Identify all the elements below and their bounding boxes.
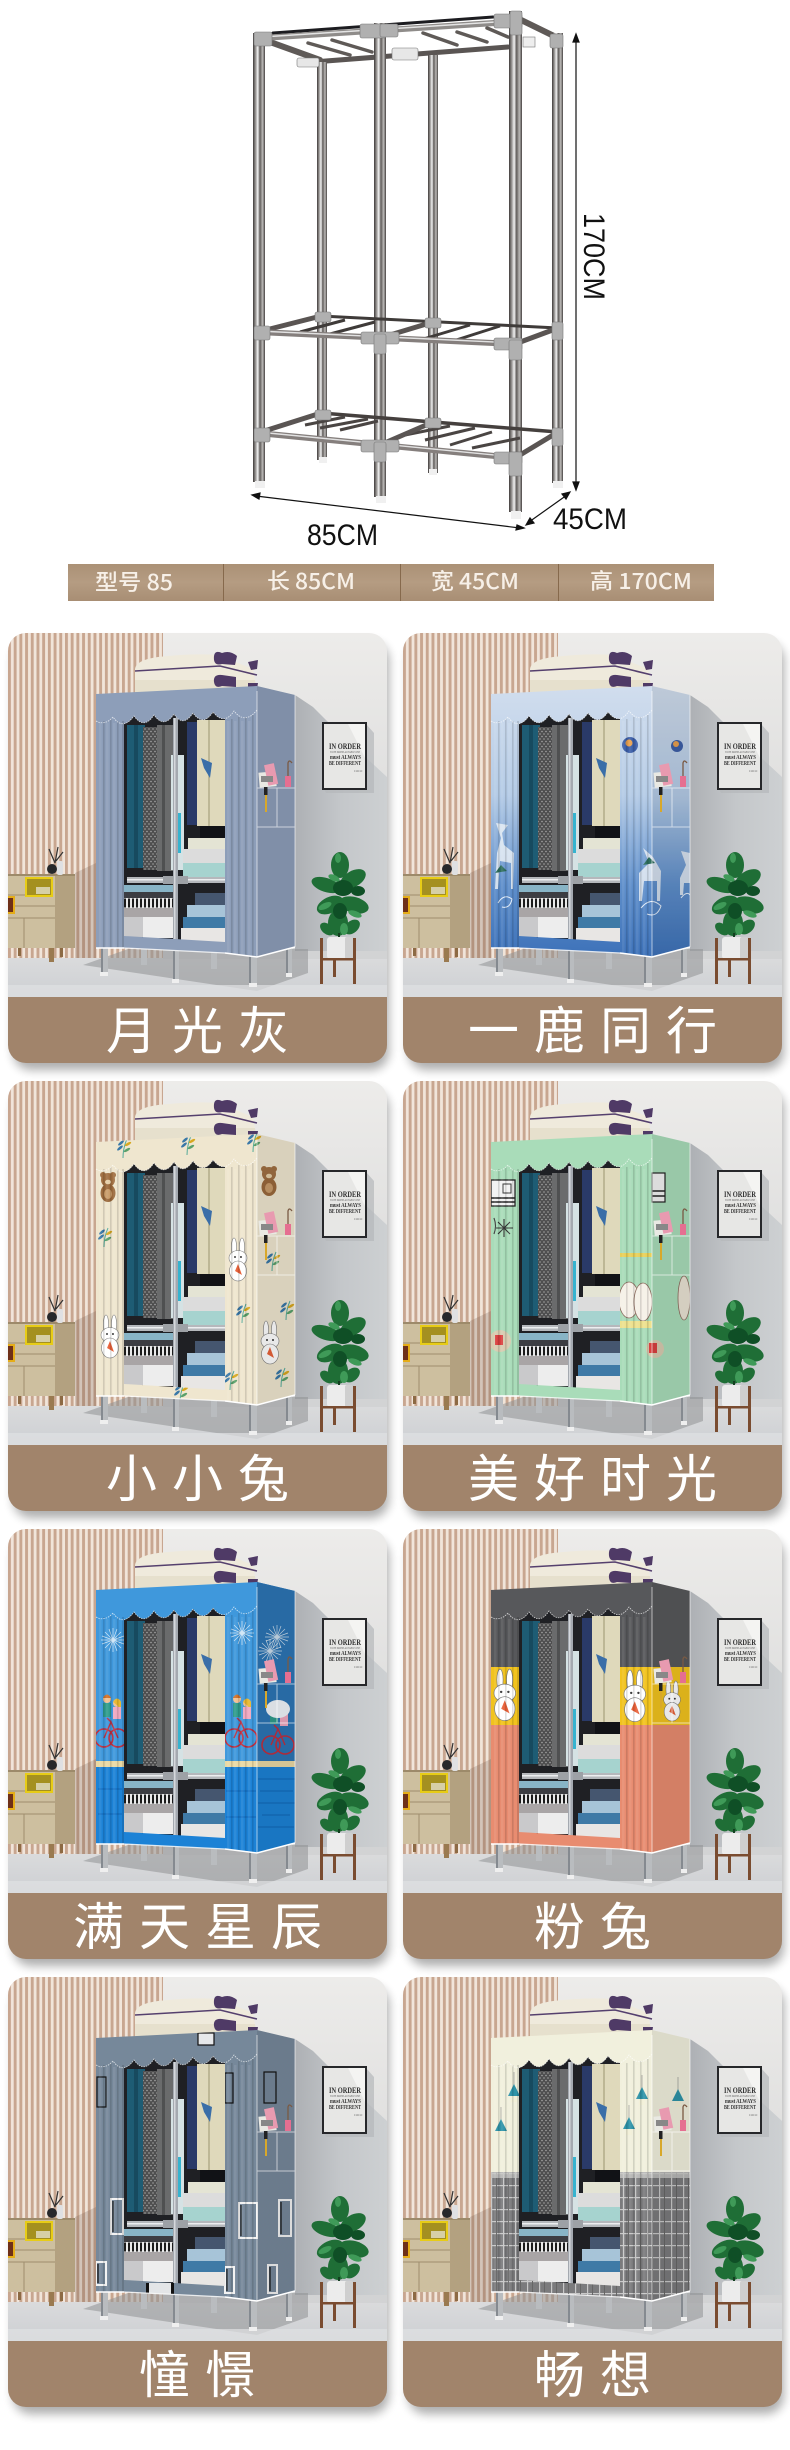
poster text	[329, 2086, 363, 2117]
base panel blocks	[146, 2283, 174, 2294]
spec: length: 长 85CM	[267, 564, 355, 596]
spec band	[68, 564, 714, 601]
poster text	[724, 2086, 758, 2117]
poster text: BE DIFFERENT	[724, 761, 756, 767]
depth arrow	[526, 492, 570, 525]
label bar	[8, 2341, 387, 2407]
poster text: BE DIFFERENT	[724, 1209, 756, 1215]
poster text: COCO	[749, 1217, 758, 1221]
red tea cups	[489, 1330, 664, 1358]
poster text: BE DIFFERENT	[724, 2105, 756, 2111]
height arrow	[573, 34, 579, 490]
deer figures	[495, 823, 690, 901]
poster text: TO BE IRREPLACEABLE ONE	[330, 2094, 360, 2098]
label text: 憧憬	[139, 2334, 271, 2408]
poster text	[724, 742, 758, 773]
rack diagram: bare steel wardrobe frame	[253, 11, 563, 519]
poster text: must ALWAYS	[725, 2099, 757, 2105]
label bar	[8, 997, 387, 1063]
panel: 美好时光	[403, 1081, 784, 1518]
poster text: IN ORDER	[329, 742, 361, 751]
label bar	[403, 2341, 782, 2407]
label text: 满天星辰	[73, 1886, 337, 1960]
poster text: COCO	[354, 1217, 363, 1221]
label text: 畅想	[534, 2334, 666, 2408]
poster text: IN ORDER	[724, 1190, 756, 1199]
joints	[254, 11, 563, 476]
poster text: COCO	[354, 1665, 363, 1669]
panel: 一鹿同行	[403, 633, 784, 1070]
panel: 憧憬	[8, 1977, 389, 2414]
label text: 一鹿同行	[468, 990, 732, 1064]
poster text: COCO	[749, 769, 758, 773]
poster text: must ALWAYS	[725, 755, 757, 761]
poster text: must ALWAYS	[725, 1651, 757, 1657]
poster text	[329, 1638, 363, 1669]
flower motifs	[622, 737, 683, 753]
poster text: IN ORDER	[724, 1638, 756, 1647]
poster text: must ALWAYS	[330, 2099, 362, 2105]
label bar	[8, 1445, 387, 1511]
poster text: COCO	[354, 2113, 363, 2117]
poster text: IN ORDER	[724, 742, 756, 751]
label bar	[8, 1893, 387, 1959]
label text: 粉兔	[534, 1886, 666, 1960]
bottom shelf	[258, 413, 558, 458]
sprigs	[97, 1133, 295, 1403]
poster text: IN ORDER	[329, 1638, 361, 1647]
width arrow	[252, 493, 524, 530]
poster text: TO BE IRREPLACEABLE ONE	[725, 1198, 755, 1202]
label bar	[403, 1893, 782, 1959]
depth label: 45CM	[553, 503, 627, 536]
panel: 畅想	[403, 1977, 784, 2414]
poster text: BE DIFFERENT	[329, 1657, 361, 1663]
cyclists	[95, 1694, 294, 1754]
poster text	[329, 742, 363, 773]
bears	[100, 1166, 277, 1202]
poster text: must ALWAYS	[330, 1203, 362, 1209]
poster text: must ALWAYS	[330, 755, 362, 761]
cards	[491, 1173, 665, 1206]
poster text: BE DIFFERENT	[329, 2105, 361, 2111]
doodle	[494, 1218, 513, 1237]
label text: 月光灰	[106, 990, 304, 1064]
poster text: BE DIFFERENT	[329, 1209, 361, 1215]
rabbit pair	[619, 1253, 690, 1328]
hanging lamps	[495, 2072, 684, 2137]
width label: 85CM	[307, 519, 378, 552]
label bar	[403, 1445, 782, 1511]
posts	[253, 11, 563, 512]
poster text: BE DIFFERENT	[724, 1657, 756, 1663]
panel: 小小兔	[8, 1081, 389, 1518]
geometric frames	[97, 2033, 276, 2107]
poster text	[329, 1190, 363, 1221]
spec: width: 宽 45CM	[431, 564, 519, 596]
spec: height: 高 170CM	[590, 564, 692, 596]
top shelf frame	[259, 17, 558, 62]
poster text: TO BE IRREPLACEABLE ONE	[725, 750, 755, 754]
poster text: TO BE IRREPLACEABLE ONE	[330, 1646, 360, 1650]
water ripples	[98, 1779, 295, 1827]
poster text: TO BE IRREPLACEABLE ONE	[725, 2094, 755, 2098]
post feet	[255, 457, 563, 519]
poster text: must ALWAYS	[330, 1651, 362, 1657]
poster text	[724, 1190, 758, 1221]
height label: 170CM	[577, 213, 610, 300]
spec: model: 型号 85	[95, 565, 173, 597]
label bar	[403, 997, 782, 1063]
poster text: IN ORDER	[724, 2086, 756, 2095]
fireworks	[101, 1621, 289, 1663]
poster text	[724, 1638, 758, 1669]
poster text: COCO	[749, 1665, 758, 1669]
poster text: must ALWAYS	[725, 1203, 757, 1209]
label text: 美好时光	[468, 1438, 732, 1512]
label text: 小小兔	[106, 1438, 304, 1512]
poster text: TO BE IRREPLACEABLE ONE	[725, 1646, 755, 1650]
panel: 满天星辰	[8, 1529, 389, 1966]
poster text: IN ORDER	[329, 1190, 361, 1199]
poster text: TO BE IRREPLACEABLE ONE	[330, 1198, 360, 1202]
panel: 月光灰	[8, 633, 389, 1070]
poster text: BE DIFFERENT	[329, 761, 361, 767]
poster text: TO BE IRREPLACEABLE ONE	[330, 750, 360, 754]
middle shelf	[258, 316, 558, 344]
rabbits	[494, 1669, 680, 1722]
poster text: IN ORDER	[329, 2086, 361, 2095]
poster text: COCO	[354, 769, 363, 773]
rabbits	[101, 1238, 279, 1364]
poster text: COCO	[749, 2113, 758, 2117]
panel: 粉兔	[403, 1529, 784, 1966]
